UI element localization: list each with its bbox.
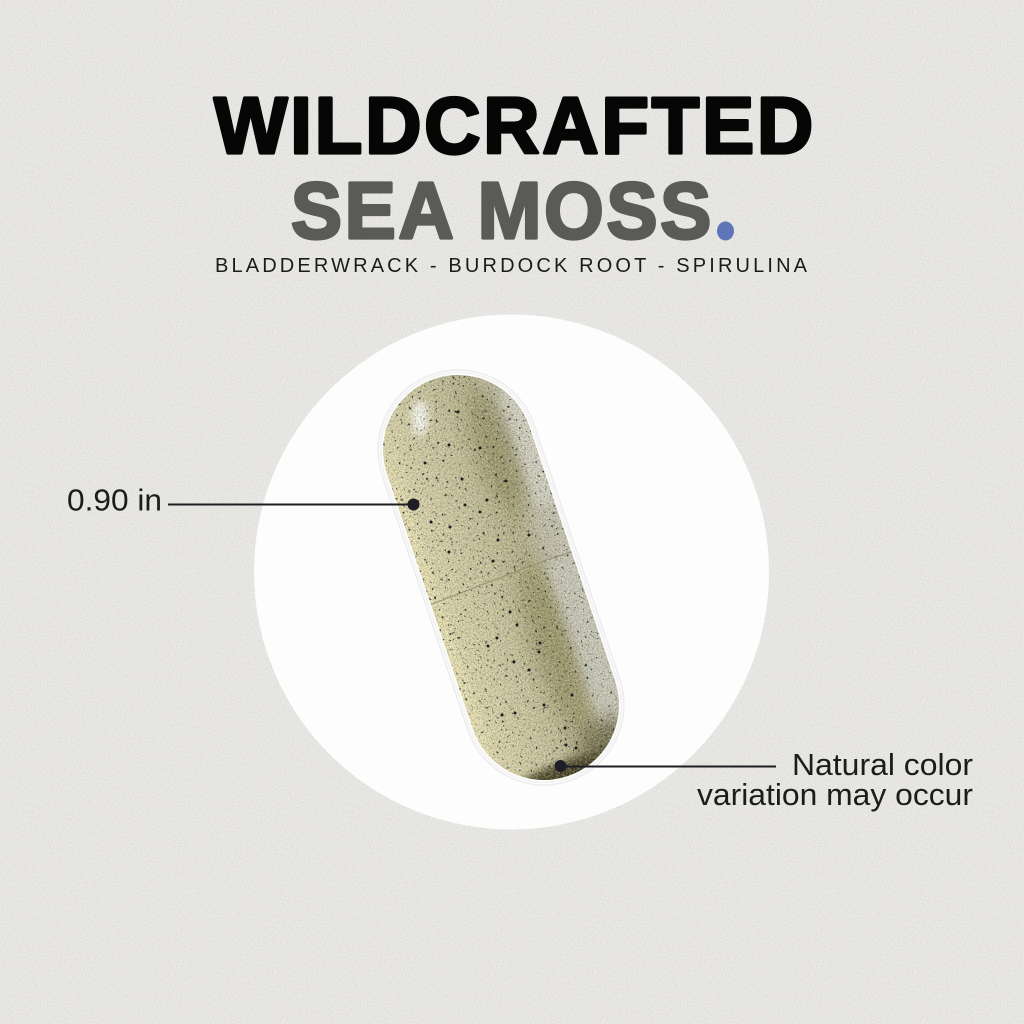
capsule — [378, 370, 624, 786]
capsule outline — [357, 349, 645, 806]
shading bands — [392, 385, 619, 780]
callout: size — [67, 482, 420, 518]
subtitle: BLADDERWRACK - BURDOCK ROOT - SPIRULINA — [215, 255, 808, 277]
title period — [717, 222, 734, 240]
size leader line — [168, 504, 413, 506]
callout: colour — [554, 747, 973, 812]
dark speckles — [425, 412, 576, 748]
size marker — [408, 498, 420, 510]
white circle backdrop — [254, 314, 769, 830]
capsule seam — [429, 552, 573, 604]
capsule body — [383, 375, 619, 780]
colour leader line — [561, 766, 776, 768]
colour note line 1: Natural color — [792, 747, 973, 782]
colour marker — [554, 760, 566, 772]
size label: 0.90 in — [67, 482, 162, 518]
title line 1: WILDCRAFTED — [214, 81, 816, 170]
colour note line 2: variation may occur — [697, 777, 973, 812]
title line 2: SEA MOSS — [291, 166, 714, 255]
title — [214, 81, 816, 255]
